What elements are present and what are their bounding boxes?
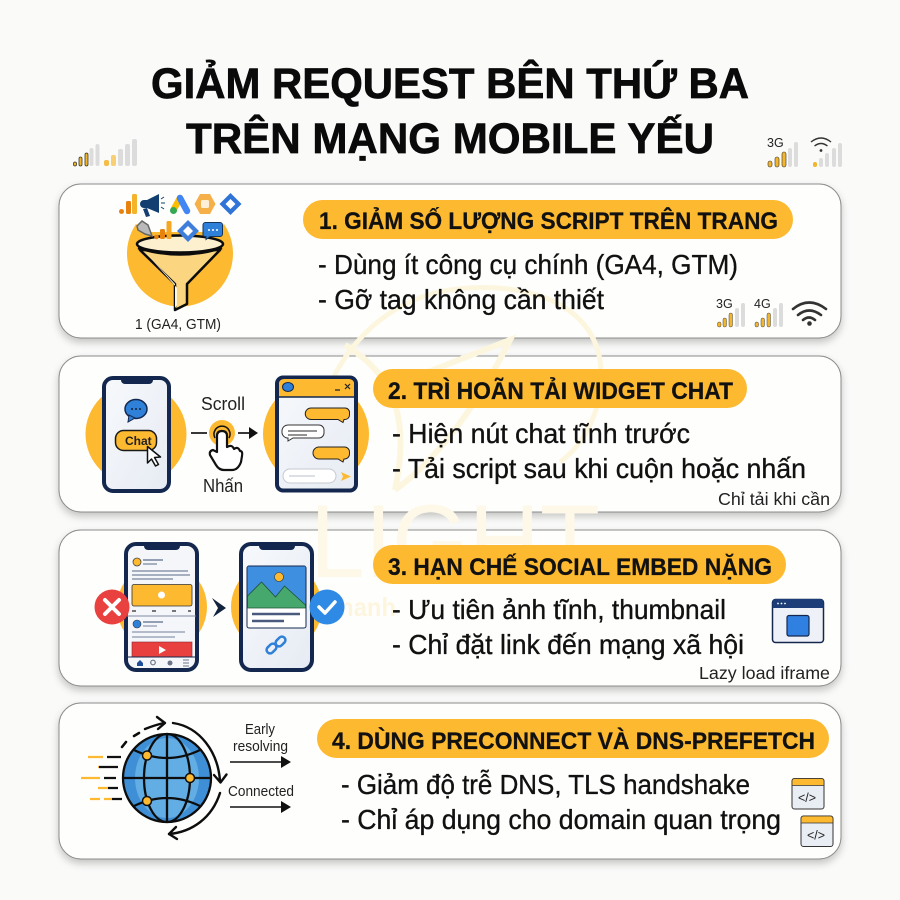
- icon: blue check badge: [310, 590, 344, 624]
- icon: speed lines: [81, 757, 122, 799]
- section 3: bullet text: - Ưu tiên ảnh tĩnh, thumbnail: [392, 594, 726, 625]
- panel: card 1 background: [59, 184, 841, 338]
- section 2: bullet text: - Tải script sau khi cuộn hoặc nhấn: [392, 453, 806, 484]
- title: TRÊN MẠNG MOBILE YẾU: [186, 114, 714, 163]
- label: Scroll: Scroll: [201, 394, 245, 414]
- icon: phone with chat button: Chat: [125, 434, 152, 448]
- section 1: heading pill: 1. GIẢM SỐ LƯỢNG SCRIPT TRÊN TRANG: [319, 206, 778, 235]
- icon: yellow circle behind feed phone: [117, 562, 207, 652]
- section 2: heading pill: 2. TRÌ HOÃN TẢI WIDGET CHAT: [388, 376, 733, 405]
- panel: card 2 background: [59, 356, 841, 512]
- icon: phone with chat button: [104, 377, 169, 491]
- icon: circular arrows: [122, 717, 226, 839]
- icon: 3G and wifi signal top right: [767, 136, 842, 167]
- title: [151, 59, 749, 163]
- icon: code window one: [792, 778, 824, 809]
- icon: funnel: [137, 236, 223, 310]
- section 2: chat widget illustration: [86, 377, 369, 496]
- arrow: connected: [230, 801, 291, 813]
- icon: globe: [123, 734, 211, 822]
- watermark logo: LIGHT: [310, 484, 600, 600]
- section 4: bullet text: - Giảm độ trễ DNS, TLS handshake: [341, 769, 750, 800]
- icon: tag manager diamond: [220, 193, 242, 215]
- icon: diamond in funnel: [177, 220, 199, 242]
- section 3: note: Lazy load iframe: [699, 663, 830, 683]
- icon: iframe window: [772, 599, 824, 642]
- icon: megaphone: [140, 194, 165, 217]
- icon: code window two: </>: [807, 828, 825, 842]
- icon: yellow circle behind funnel: [127, 224, 233, 307]
- watermark logo: [310, 288, 601, 622]
- icon: chat bubble in funnel: [203, 222, 222, 240]
- section 4: globe illustration: [81, 717, 294, 839]
- icon: analytics bars: [119, 194, 137, 214]
- section 1: heading pill: [303, 200, 793, 239]
- section 1: network icons: 3G: [716, 297, 733, 311]
- icon: 3G and wifi signal top right: 3G: [767, 136, 784, 150]
- section 1: network icons: 4G: [754, 297, 771, 311]
- icon: yellow circle behind left phone: [86, 384, 186, 484]
- section 2: bullet text: [392, 418, 806, 484]
- label: Connected: Connected: [228, 784, 294, 800]
- icon: feed phone: [126, 543, 197, 670]
- label: 1 (GA4, GTM): 1 (GA4, GTM): [135, 316, 221, 333]
- section 1: script funnel illustration: [119, 193, 242, 333]
- icon: yellow circle behind link phone: [231, 562, 322, 652]
- title: GIẢM REQUEST BÊN THỨ BA: [151, 59, 749, 108]
- panel: card 3 background: [59, 530, 841, 686]
- icon: red cross badge: [94, 590, 130, 624]
- section 2: note: Chỉ tải khi cần: [718, 489, 830, 509]
- icon: chat window: [277, 378, 356, 490]
- section 3: social embed illustration: [94, 543, 344, 670]
- section 4: bullet text: [341, 769, 781, 835]
- section 2: bullet text: - Hiện nút chat tĩnh trước: [392, 418, 690, 449]
- label: Nhấn: Nhấn: [203, 476, 243, 496]
- label: Early resolving: Early: [245, 722, 276, 738]
- section 4: bullet text: - Chỉ áp dụng cho domain quan trọng: [341, 804, 781, 835]
- icon: yellow circle behind chat window: [263, 381, 369, 487]
- arrow: early resolving: [230, 756, 291, 768]
- section 3: heading pill: [373, 545, 786, 584]
- icon: weak signal bars top left: [74, 139, 137, 166]
- icon: ads logo: [170, 198, 187, 214]
- section 3: bullet text: - Chỉ đặt link đến mạng xã hội: [392, 629, 744, 660]
- icon: tap hand with arrow: [191, 420, 258, 470]
- label: Early resolving: resolving: [233, 739, 288, 755]
- icon: chevron arrow: [212, 598, 226, 617]
- icon: thumbnail phone: [241, 543, 312, 670]
- section 1: bullet text: - Dùng ít công cụ chính (GA4, GTM): [318, 249, 738, 280]
- section 1: network icons: [716, 297, 826, 327]
- section 2: heading pill: [373, 369, 747, 408]
- icon: code window one: </>: [798, 791, 816, 805]
- section 4: heading pill: 4. DÙNG PRECONNECT VÀ DNS-PREFETCH: [332, 727, 815, 755]
- label: Early resolving: [233, 722, 288, 755]
- icon: hexagon tag: [194, 194, 216, 214]
- section 3: heading pill: 3. HẠN CHẾ SOCIAL EMBED NẶNG: [388, 553, 772, 581]
- watermark logo: Nhanh: [322, 592, 396, 622]
- icon: analytics bars in funnel: [154, 221, 172, 239]
- section 1: bullet text: [318, 249, 738, 315]
- section 1: bullet text: - Gỡ tag không cần thiết: [318, 284, 604, 315]
- icon: pencil tag: [137, 221, 152, 236]
- icon: code window two: [801, 816, 833, 846]
- section 4: heading pill: [317, 719, 829, 758]
- panel: card 4 background: [59, 703, 841, 859]
- section 3: bullet text: [392, 594, 744, 660]
